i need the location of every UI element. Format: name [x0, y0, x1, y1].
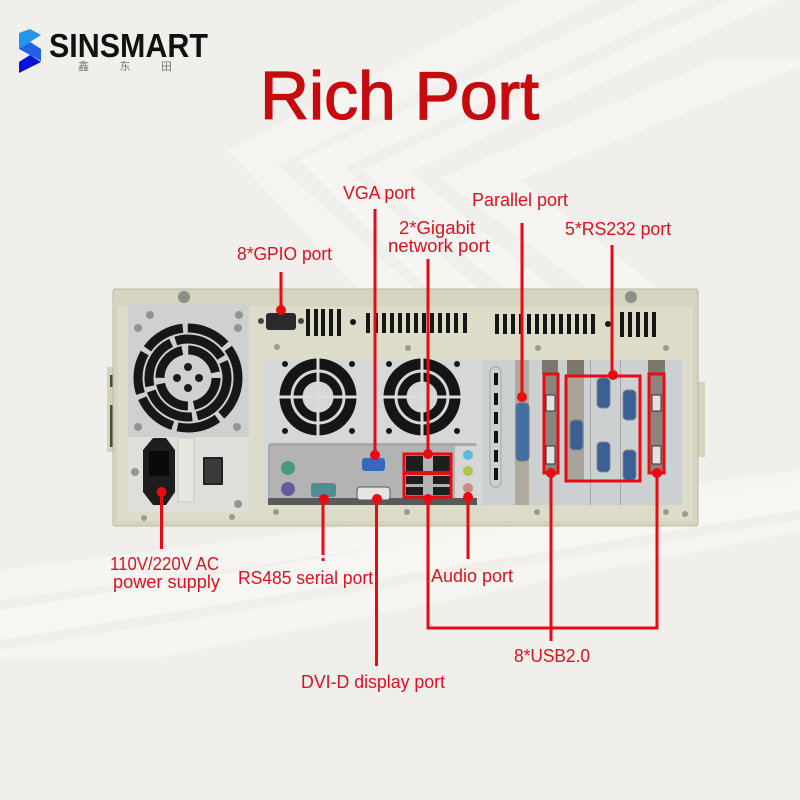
power line [156, 487, 166, 549]
parallel connector [516, 403, 529, 461]
port labels [110, 183, 671, 692]
parallel line [517, 223, 527, 402]
power switch [203, 457, 223, 485]
audio label: Audio port [431, 566, 513, 586]
DVI port [357, 487, 390, 500]
rear fan left [275, 354, 361, 440]
gigabit label [388, 218, 490, 256]
audio jacks [463, 450, 473, 460]
PS2 ports [281, 461, 295, 475]
USB frames and bracket [423, 374, 664, 641]
PSU fan grille [138, 328, 238, 428]
RJ45 and USB ports [406, 456, 450, 495]
VGA port [362, 458, 385, 471]
slot cover holes [490, 367, 501, 487]
logo chinese name: 鑫 东 田 [78, 59, 172, 73]
power supply unit [128, 304, 249, 512]
DVI line [372, 494, 382, 666]
side handles [107, 367, 705, 457]
RS485 label: RS485 serial port [238, 568, 373, 588]
IO panel [268, 443, 477, 505]
RS485 line [319, 494, 329, 561]
expansion cards [482, 360, 682, 505]
power label [110, 554, 220, 592]
power label: power supply [113, 572, 220, 592]
chassis small screws [141, 344, 688, 521]
logo icon [19, 29, 41, 73]
gigabit label: 2*Gigabit [399, 218, 475, 238]
GPIO label: 8*GPIO port [237, 244, 332, 264]
RS232 line and frame [566, 245, 640, 481]
fan plate [263, 354, 683, 505]
power label: 110V/220V AC [110, 554, 219, 574]
gigabit label: network port [388, 236, 490, 256]
logo wordmark: SINSMART [49, 27, 208, 64]
GPIO port [258, 313, 304, 330]
top screws [178, 291, 637, 303]
title: Rich Port [260, 58, 539, 134]
callout lines [156, 209, 664, 666]
rear fan right [379, 354, 465, 440]
serial port [311, 483, 336, 497]
ventilation slots [306, 309, 656, 337]
PSU screws [131, 311, 243, 508]
RS232 label: 5*RS232 port [565, 219, 671, 239]
parallel label: Parallel port [472, 190, 568, 210]
rating label [178, 438, 194, 502]
DVI label: DVI-D display port [301, 672, 445, 692]
USB connectors on cards [546, 395, 661, 464]
audio line [463, 492, 473, 559]
GPIO line [276, 272, 286, 315]
logo [19, 27, 208, 73]
USB label: 8*USB2.0 [514, 646, 590, 666]
VGA label: VGA port [343, 183, 415, 203]
RS232 connectors [570, 378, 636, 480]
chassis rear panel [107, 289, 705, 526]
gigabit line and frame [404, 259, 451, 497]
VGA line [370, 209, 380, 460]
AC power socket [143, 438, 175, 505]
